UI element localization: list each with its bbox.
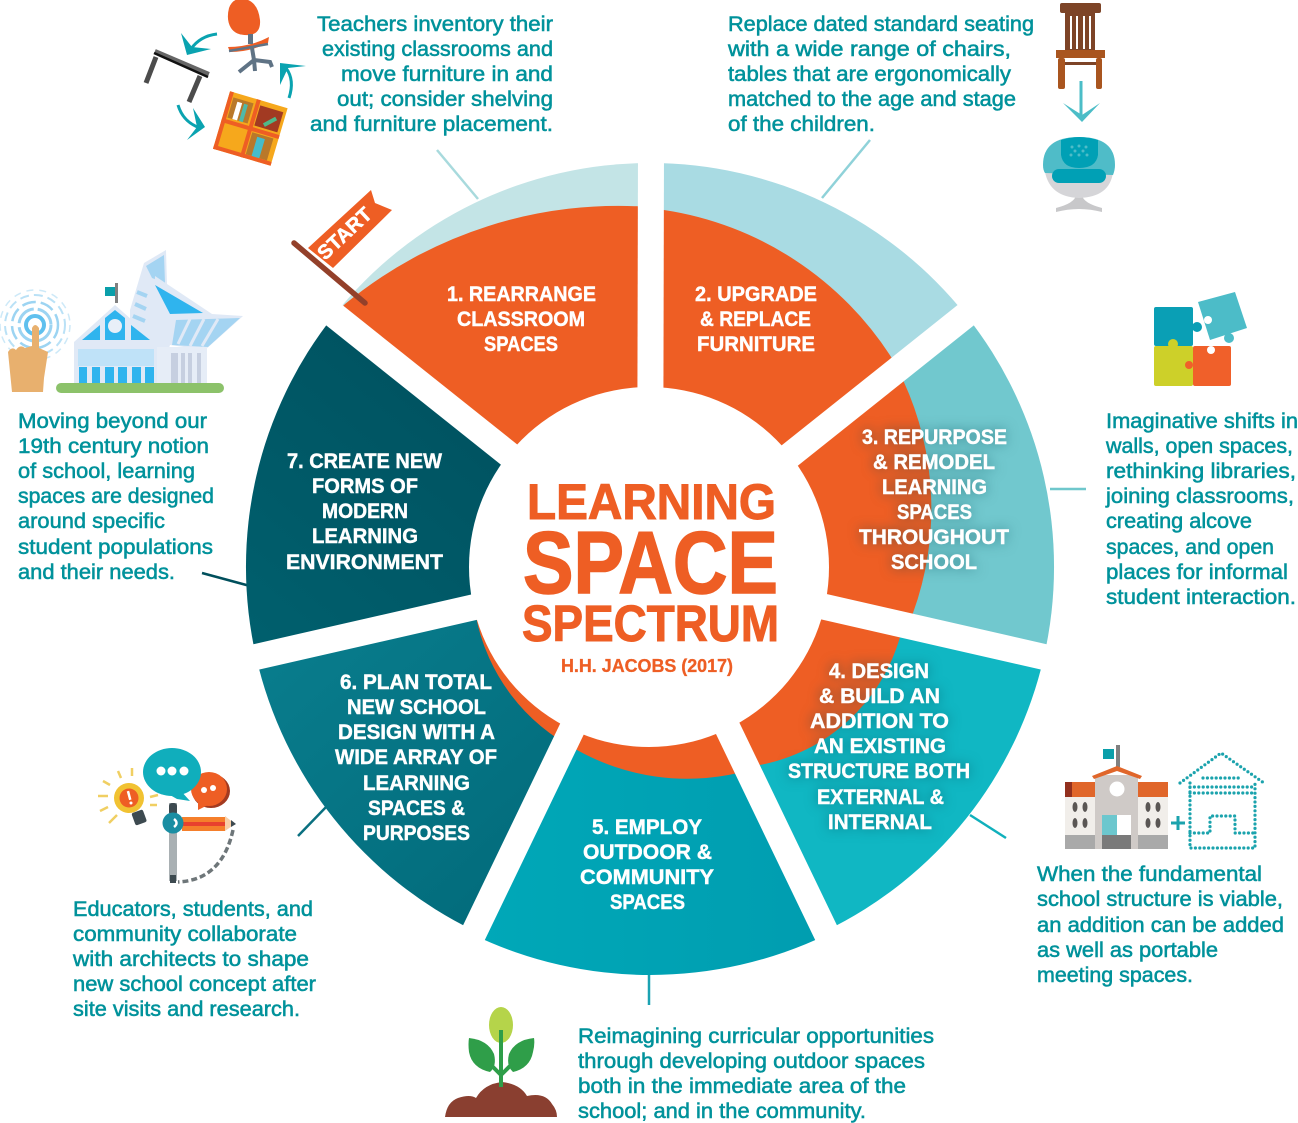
label: segment 4: INTERNAL (828, 810, 932, 834)
text: step 4 description: as well as portable (1037, 938, 1218, 962)
label: segment 1: 1. REARRANGE (447, 282, 596, 306)
text: step 3 description: creating alcove (1106, 509, 1252, 533)
text: step 1 description (310, 12, 553, 136)
modern building (56, 250, 243, 393)
compass and pencil (162, 803, 236, 883)
icon: school plus addition (1065, 745, 1264, 849)
table (146, 51, 209, 102)
label: segment 1: CLASSROOM (457, 307, 585, 331)
label: segment 4: STRUCTURE BOTH (788, 759, 970, 783)
office chair (228, 0, 272, 72)
text: step 5 description: both in the immediate area of the (578, 1074, 906, 1098)
text: step 2 description: Replace dated standard seating (728, 12, 1034, 36)
egg chair (1043, 137, 1115, 212)
label: segment 7 (286, 449, 443, 574)
text: step 1 description: Teachers inventory their (317, 12, 553, 36)
label: segment 4 (788, 659, 970, 834)
label: segment 3: SCHOOL (891, 550, 977, 574)
segment 6 (256, 567, 650, 931)
text: step 5 description: Reimagining curricular opportunities (578, 1024, 934, 1048)
icon: touch hand and modern school (0, 250, 243, 393)
text: step 5 description (578, 1024, 934, 1123)
text: step 4 description: school structure is viable, (1037, 887, 1283, 911)
label: segment 4: AN EXISTING (814, 734, 946, 758)
speech bubbles (143, 748, 230, 810)
shelf (213, 91, 288, 166)
icon: wooden chair to egg chair (1043, 3, 1115, 212)
label: segment 6: SPACES & (368, 796, 465, 820)
segment 2 light band (650, 163, 966, 567)
label: segment 7: MODERN (322, 499, 408, 523)
label: segment 3: 3. REPURPOSE (862, 425, 1007, 449)
text: step 1 description: out; consider shelving (337, 87, 553, 111)
touch rings (0, 290, 70, 360)
text: step 6 description: Educators, students, and (73, 897, 313, 921)
text: step 6 description: site visits and research. (73, 997, 300, 1021)
label: segment 4: 4. DESIGN (829, 659, 929, 683)
text: step 7 description: student populations (18, 535, 213, 559)
segment 4 (650, 567, 1044, 931)
wooden chair (1056, 3, 1105, 89)
text: step 3 description: places for informal (1106, 560, 1288, 584)
plus sign (1171, 816, 1185, 830)
text: step 7 description (18, 409, 214, 584)
title (522, 474, 779, 676)
label: segment 6: 6. PLAN TOTAL (340, 670, 492, 694)
icon: collaboration and design (98, 748, 236, 883)
wheel: seven segments (240, 147, 1060, 975)
text: step 4 description: an addition can be added (1037, 913, 1284, 937)
hand (8, 325, 48, 392)
segment 3 (650, 315, 1054, 657)
text: step 6 description: new school concept after (73, 972, 316, 996)
text: step 1 description: move furniture in and (341, 62, 553, 86)
arrow: table to shelf (178, 105, 205, 140)
label: segment 7: ENVIRONMENT (286, 550, 443, 574)
label: segment 5: OUTDOOR & (583, 840, 712, 864)
text: step 3 description: spaces, and open (1106, 535, 1274, 559)
title: SPACE (523, 513, 778, 612)
label: segment 6: NEW SCHOOL (347, 695, 486, 719)
text: step 7 description: Moving beyond our (18, 409, 207, 433)
text: step 2 description: matched to the age and stage (728, 87, 1016, 111)
label: segment 6 (335, 670, 497, 845)
arrow: shelf to chair (280, 63, 306, 98)
text: step 4 description: When the fundamental (1037, 862, 1262, 886)
text: step 7 description: spaces are designed (18, 484, 214, 508)
text: step 2 description: with a wide range of chairs, (727, 37, 1011, 61)
text: step 7 description: and their needs. (18, 560, 175, 584)
label: segment 5: 5. EMPLOY (592, 815, 702, 839)
text: step 3 description (1105, 409, 1298, 609)
label: segment 5: COMMUNITY (580, 865, 714, 889)
label: segment 6: LEARNING (363, 771, 470, 795)
text: step 7 description: around specific (18, 509, 165, 533)
text: step 7 description: 19th century notion (18, 434, 209, 458)
label: segment 4: EXTERNAL & (817, 785, 944, 809)
text: step 6 description (72, 897, 316, 1021)
orange spiral overlay (334, 206, 931, 779)
text: step 1 description: existing classrooms and (322, 37, 553, 61)
title: LEARNING (527, 474, 776, 530)
text: step 6 description: community collaborate (73, 922, 297, 946)
text: step 1 description: and furniture placement. (310, 112, 553, 136)
label: segment 3: LEARNING (882, 475, 987, 499)
text: step 3 description: joining classrooms, (1105, 484, 1294, 508)
text: step 4 description: meeting spaces. (1037, 963, 1193, 987)
label: segment 3: & REMODEL (873, 450, 995, 474)
text: step 7 description: of school, learning (18, 459, 195, 483)
arrow: down (1063, 81, 1100, 122)
segment 7 (246, 315, 650, 657)
label: segment 5 (580, 815, 714, 914)
label: segment 3: SPACES (897, 500, 972, 524)
text: step 4 description (1037, 862, 1284, 987)
label: segment 2: FURNITURE (697, 332, 815, 356)
text: step 3 description: Imaginative shifts in (1106, 409, 1298, 433)
label: segment 7: LEARNING (312, 524, 418, 548)
title: SPECTRUM (522, 595, 779, 652)
dotted addition outline (1180, 753, 1264, 848)
label: segment 4: ADDITION TO (810, 709, 949, 733)
label: segment 4: & BUILD AN (819, 684, 940, 708)
icon: rearranged furniture (146, 0, 306, 166)
label: segment 2 (695, 282, 817, 356)
light bulb (98, 768, 158, 826)
label: segment 6: PURPOSES (363, 821, 470, 845)
icon: puzzle (1154, 292, 1247, 386)
text: step 6 description: with architects to shape (72, 947, 309, 971)
label: segment 7: 7. CREATE NEW (287, 449, 443, 473)
arrow: chair to table (181, 33, 217, 55)
text: step 5 description: school; and in the community. (578, 1099, 866, 1123)
label: segment 2: 2. UPGRADE (695, 282, 817, 306)
title: H.H. JACOBS (2017) (561, 656, 733, 676)
text: step 2 description: tables that are ergonomically (728, 62, 1011, 86)
leader lines (202, 140, 1086, 1005)
start flag: START (313, 204, 377, 265)
text: step 3 description: walls, open spaces, (1105, 434, 1293, 458)
segment 5 (473, 567, 827, 975)
label: segment 1 (447, 282, 596, 356)
label: segment 2: & REPLACE (700, 307, 811, 331)
text: step 2 description: of the children. (728, 112, 875, 136)
label: segment 3: THROUGHOUT (859, 525, 1009, 549)
text: step 3 description: rethinking libraries, (1106, 459, 1296, 483)
start flag (294, 190, 392, 303)
label: segment 1: SPACES (484, 332, 558, 356)
segment 1 light band (334, 163, 650, 567)
text: step 3 description: student interaction. (1106, 585, 1296, 609)
school building (1065, 745, 1168, 849)
label: segment 6: DESIGN WITH A (338, 720, 495, 744)
text: step 2 description (727, 12, 1034, 136)
label: segment 3 (859, 425, 1009, 574)
icon: sprout (445, 1007, 557, 1117)
text: step 5 description: through developing outdoor spaces (578, 1049, 925, 1073)
label: segment 6: WIDE ARRAY OF (335, 745, 497, 769)
label: segment 5: SPACES (610, 890, 685, 914)
label: segment 7: FORMS OF (312, 474, 418, 498)
